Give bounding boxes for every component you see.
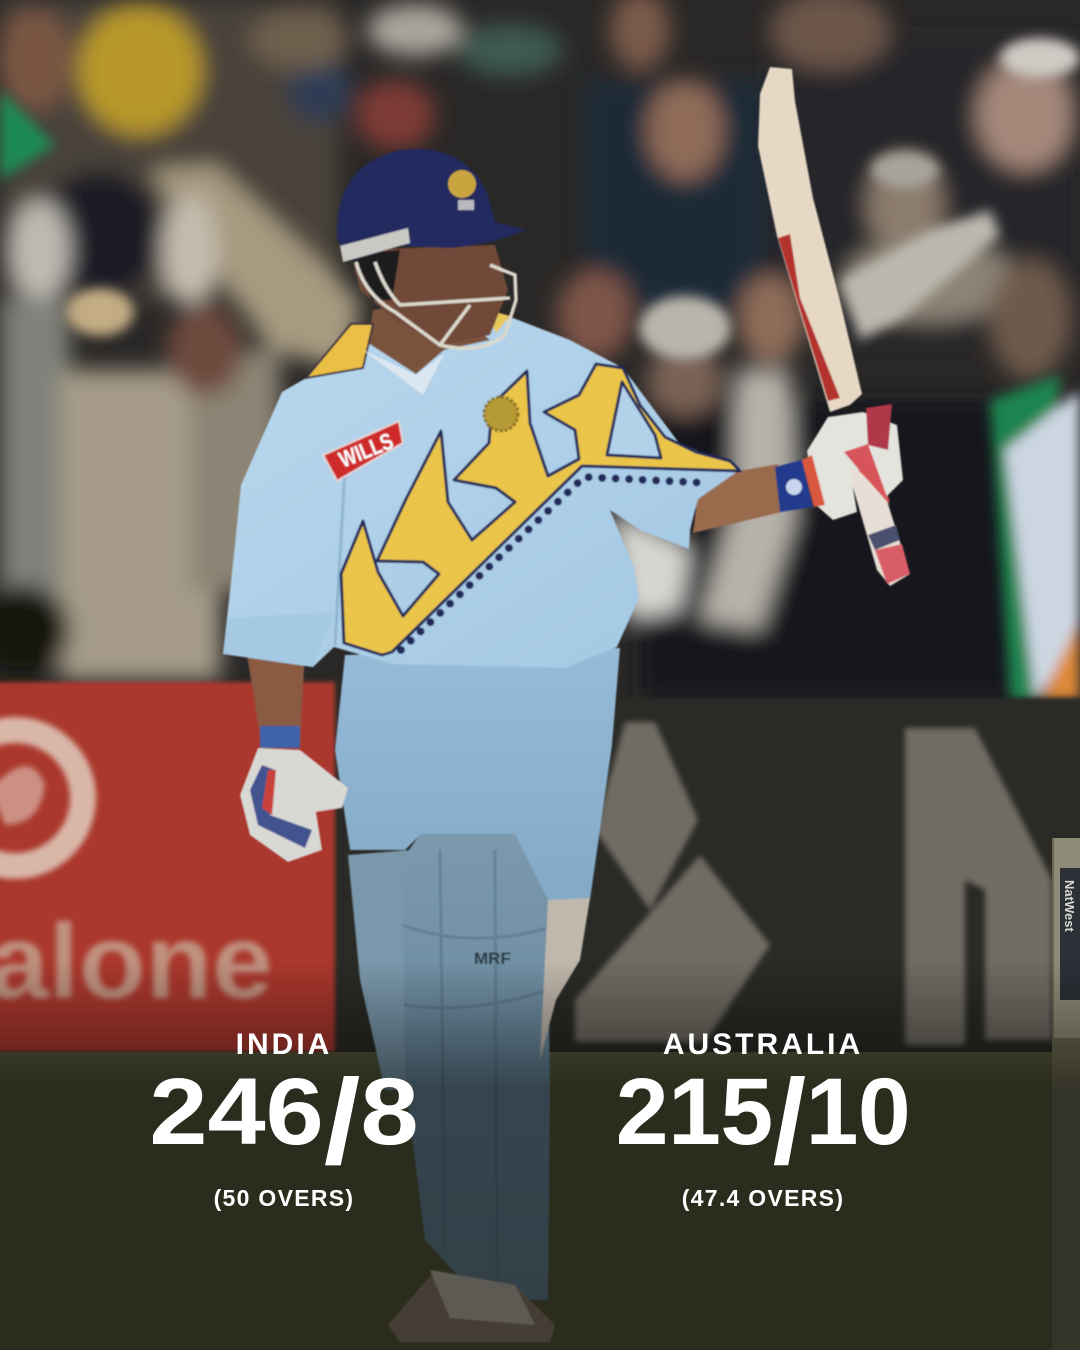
collar (306, 309, 510, 395)
neck (368, 300, 490, 374)
score: India: (50 OVERS) (214, 1185, 354, 1211)
stump (1052, 838, 1080, 1350)
score: Australia: (47.4 OVERS) (682, 1185, 844, 1211)
stump: NatWest (1062, 880, 1077, 932)
front leg pad (402, 834, 550, 1300)
helmet (337, 149, 526, 348)
shirt dot row (401, 477, 708, 650)
batsman (223, 67, 910, 1342)
crowd background (0, 0, 1080, 700)
grass field (0, 1052, 1080, 1350)
bat (758, 67, 910, 586)
dark sponsor board (320, 698, 1080, 1058)
wills logo (323, 421, 403, 481)
shoe (388, 1270, 555, 1342)
wills logo: WILLS (335, 428, 397, 473)
score: India: 246/8 (149, 1055, 419, 1189)
trousers (335, 648, 620, 900)
score: India: INDIA (236, 1028, 332, 1061)
red vodafone advertising board (0, 682, 335, 1052)
dark bottom gradient (0, 960, 1080, 1350)
batsman: MRF (474, 949, 511, 968)
left glove (240, 726, 348, 862)
shirt emblem (484, 397, 518, 431)
face (350, 245, 508, 345)
score: Australia: AUSTRALIA (663, 1028, 863, 1061)
inner pad (540, 898, 590, 1060)
score: Australia: 215/10 (616, 1055, 910, 1189)
back leg pad (348, 850, 420, 1090)
right glove (802, 404, 903, 520)
right forearm (693, 464, 782, 533)
shirt yellow crown graphic (341, 364, 740, 655)
shirt body (223, 318, 741, 668)
left forearm (247, 650, 305, 745)
right wrist band (775, 460, 813, 512)
